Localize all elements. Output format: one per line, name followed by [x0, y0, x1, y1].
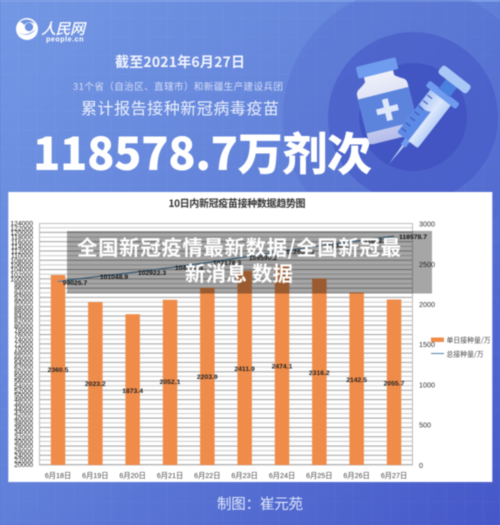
left axis labels: 28000 — [14, 444, 33, 451]
left axis labels: 110000 — [11, 253, 33, 260]
left axis labels: 72000 — [14, 342, 33, 348]
subheading: cumulative vaccinations: 累计报告接种新冠病毒疫苗 — [81, 95, 279, 119]
right axis labels: 1000 — [419, 380, 435, 390]
left axis labels: 120000 — [10, 230, 33, 237]
line value labels — [63, 234, 427, 287]
date labels: 6月21日 — [157, 471, 183, 480]
left axis labels: 94000 — [14, 290, 33, 297]
bar value labels: 2023.2 — [85, 381, 106, 388]
left axis labels: 78000 — [14, 328, 33, 334]
left axis labels: 88000 — [14, 304, 33, 311]
line value labels: 114380.5 — [324, 243, 352, 250]
line value labels: 109590.2 — [249, 255, 277, 262]
left axis labels: 106000 — [10, 262, 33, 270]
left axis labels: 90000 — [14, 300, 33, 307]
left axis labels: 108000 — [10, 258, 33, 265]
left axis labels: 40000 — [14, 416, 33, 423]
left axis labels: 68000 — [14, 351, 33, 358]
left axis labels: 76000 — [14, 332, 33, 339]
left axis labels: 112000 — [11, 249, 33, 256]
left axis labels: 48000 — [14, 397, 33, 404]
date labels: 6月27日 — [381, 471, 407, 480]
legend: 单日接种量/万 — [446, 334, 491, 344]
heading: date: 截至2021年6月27日 — [115, 52, 245, 72]
overlay: title banner — [67, 231, 432, 294]
panel: chart — [8, 192, 492, 482]
left axis labels: 38000 — [14, 420, 33, 427]
left axis labels: 80000 — [14, 323, 33, 330]
line value labels: 102922.3 — [138, 270, 166, 277]
line value labels: 101048.9 — [100, 274, 128, 281]
left axis labels: 54000 — [14, 383, 33, 390]
credit: 制图：崔元苑 — [217, 493, 303, 514]
bar value labels: 2316.2 — [309, 370, 330, 377]
logo: people.cn: people.cn — [46, 34, 84, 44]
left axis labels: 26000 — [14, 448, 33, 455]
decorative concentric circles — [283, 0, 500, 247]
left axis labels: 82000 — [14, 318, 33, 325]
right axis labels — [419, 220, 435, 470]
date labels: 6月19日 — [82, 471, 108, 480]
line value labels: 118578.7 — [399, 234, 427, 241]
left axis labels: 30000 — [14, 439, 33, 446]
line value labels: 107178.3 — [213, 260, 241, 267]
left axis labels: 58000 — [14, 374, 33, 381]
overlay title text: 新消息 数据 — [185, 257, 293, 287]
left axis labels: 86000 — [14, 309, 33, 316]
date labels: 6月23日 — [231, 471, 258, 480]
left axis labels: 92000 — [14, 295, 33, 302]
date labels: 6月26日 — [343, 471, 370, 480]
left axis labels: 114000 — [11, 244, 33, 251]
left axis labels: 42000 — [14, 411, 33, 418]
icon: vaccine vial — [350, 56, 420, 145]
bar value labels — [48, 364, 405, 395]
chart title: 10日内新冠疫苗接种数据趋势图 — [168, 195, 306, 210]
subheading: regions: 31个省（自治区、直辖市）和新疆生产建设兵团 — [73, 79, 283, 93]
bar value labels: 2360.5 — [48, 367, 69, 374]
left axis labels: 124000 — [10, 221, 33, 228]
big number: 118578.7万剂次 — [33, 118, 372, 183]
left axis labels: 100000 — [10, 276, 33, 283]
left axis labels: 104000 — [10, 267, 33, 274]
left axis labels: 60000 — [14, 369, 33, 376]
right axis labels: 500 — [419, 420, 431, 430]
left axis labels: 74000 — [14, 337, 33, 344]
date labels: 6月24日 — [269, 471, 295, 480]
right axis labels: 3000 — [419, 220, 435, 228]
left axis labels: 84000 — [14, 314, 33, 321]
bar value labels: 2411.9 — [234, 366, 255, 373]
left axis labels: 98000 — [14, 281, 33, 288]
date labels: 6月22日 — [194, 471, 220, 480]
right axis labels: 0 — [419, 461, 423, 470]
left axis labels: 24000 — [14, 453, 33, 460]
logo: people.cn — [16, 18, 87, 44]
legend: 总接种量/万 — [446, 348, 484, 358]
logo: people.cn: 人民网 — [41, 18, 87, 39]
left axis labels: 66000 — [14, 355, 33, 362]
left axis labels: 20000 — [14, 462, 33, 469]
right axis labels: 2000 — [419, 300, 435, 309]
date labels: 6月25日 — [306, 471, 332, 480]
bar value labels: 2055.7 — [384, 380, 405, 388]
bar value labels: 2474.1 — [272, 364, 293, 370]
left axis labels: 56000 — [14, 379, 33, 386]
overlay title text: 全国新冠疫情最新数据/全国新冠最 — [77, 231, 401, 261]
bar value labels: 2142.5 — [346, 377, 367, 384]
icon: syringe — [374, 64, 473, 176]
left axis labels: 118000 — [11, 235, 33, 242]
left axis labels: 34000 — [14, 430, 33, 437]
bar value labels: 2203.9 — [197, 374, 218, 381]
line value labels: 116523 — [364, 238, 386, 245]
bar value labels: 2052.1 — [160, 379, 181, 386]
left axis labels: 32000 — [14, 434, 33, 441]
date labels — [45, 471, 407, 480]
left axis labels: 52000 — [14, 388, 33, 395]
date labels: 6月18日 — [45, 471, 71, 480]
left axis labels: 70000 — [14, 346, 33, 353]
legend — [431, 334, 491, 358]
line value labels: 99025.7 — [63, 280, 87, 287]
line value labels: 104974.4 — [175, 265, 203, 272]
left axis labels: 46000 — [14, 402, 33, 409]
date labels: 6月20日 — [119, 471, 146, 480]
left axis labels — [10, 221, 33, 469]
left axis labels: 50000 — [14, 392, 33, 400]
line: cumulative doses — [58, 236, 394, 282]
plot frame and grid — [40, 224, 412, 465]
left axis labels: 36000 — [14, 425, 33, 432]
left axis labels: 62000 — [14, 365, 33, 372]
right axis labels: 1500 — [419, 340, 435, 349]
bar value labels: 1873.4 — [122, 388, 143, 395]
left axis labels: 44000 — [14, 406, 33, 414]
left axis labels: 22000 — [14, 458, 33, 465]
left axis labels: 102000 — [10, 272, 33, 279]
left axis labels: 116000 — [11, 239, 33, 246]
right axis labels: 2500 — [419, 260, 435, 269]
overlay title text — [77, 231, 401, 287]
left axis labels: 64000 — [14, 360, 33, 367]
left axis labels: 96000 — [14, 286, 33, 293]
line value labels: 112064.3 — [286, 249, 314, 256]
left axis labels: 122000 — [10, 225, 33, 232]
bars: daily doses — [51, 266, 401, 465]
